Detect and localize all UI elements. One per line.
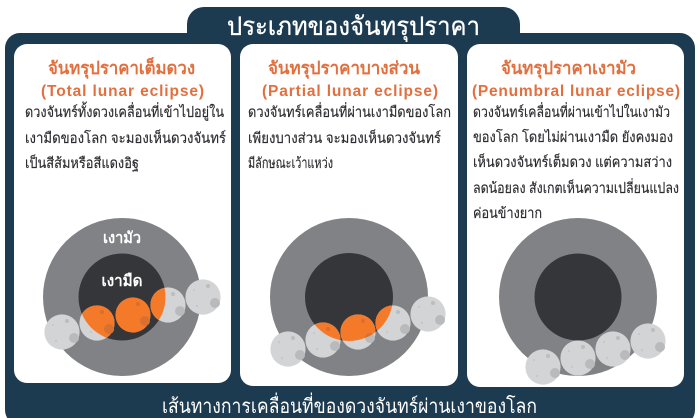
diagram: total eclipse shadow and moon path: เงามัว xyxy=(103,230,141,247)
description: penumbral eclipse: เห็นดวงจันทร์เต็มดวง แต่ความสว่าง xyxy=(473,152,672,171)
description: penumbral eclipse: ดวงจันทร์เคลื่อนที่ผ่านเข้าไปในเงามัว xyxy=(473,102,670,121)
heading: penumbral eclipse Thai: จันทรุปราคาเงามัว xyxy=(501,58,636,79)
description: partial eclipse: มีลักษณะเว้าแหว่ง xyxy=(248,155,333,172)
panel: penumbral lunar eclipse xyxy=(467,44,684,387)
diagram: total eclipse shadow and moon path: เงามืด xyxy=(102,272,142,290)
heading: partial eclipse English: (Partial lunar eclipse) xyxy=(262,83,438,100)
panel: partial lunar eclipse xyxy=(240,44,458,386)
panel: total lunar eclipse xyxy=(14,44,231,383)
heading: partial eclipse Thai: จันทรุปราคาบางส่วน xyxy=(268,58,420,79)
description: partial eclipse xyxy=(248,102,451,172)
description: total eclipse: เงามืดของโลก จะมองเห็นดวงจันทร์ xyxy=(25,128,226,147)
description: partial eclipse: ดวงจันทร์เคลื่อนที่ผ่านเงามืดของโลก xyxy=(248,102,451,121)
description: total eclipse: เป็นสีส้มหรือสีแดงอิฐ xyxy=(25,153,139,172)
heading: penumbral eclipse English: (Penumbral lunar eclipse) xyxy=(472,83,680,100)
heading: total eclipse Thai: จันทรุปราคาเต็มดวง xyxy=(48,56,195,79)
diagram: total eclipse shadow and moon path xyxy=(43,218,221,376)
diagram: partial eclipse shadow and moon path xyxy=(270,218,446,376)
description: partial eclipse: เพียงบางส่วน จะมองเห็นดวงจันทร์ xyxy=(248,128,441,147)
title: ประเภทของจันทรุปราคา xyxy=(227,11,480,42)
diagram: penumbral eclipse shadow and moon path xyxy=(499,218,666,385)
description: penumbral eclipse xyxy=(473,102,679,222)
description: total eclipse xyxy=(25,101,226,172)
description: penumbral eclipse: ค่อนข้างยาก xyxy=(473,205,542,222)
description: total eclipse: ดวงจันทร์ทั้งดวงเคลื่อนที่เข้าไปอยู่ใน xyxy=(25,101,224,121)
footer caption: เส้นทางการเคลื่อนที่ของดวงจันทร์ผ่านเงาของโลก xyxy=(162,392,537,418)
description: penumbral eclipse: ของโลก โดยไม่ผ่านเงามืด ยังคงมอง xyxy=(473,128,673,146)
heading: total eclipse English: (Total lunar eclipse) xyxy=(41,83,204,100)
